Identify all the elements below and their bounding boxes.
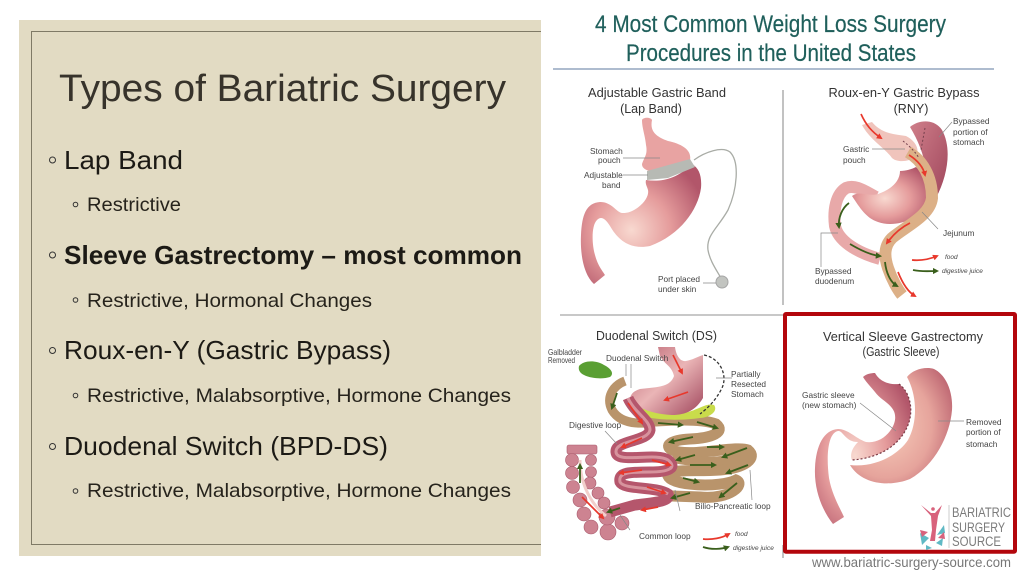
heading: DS: Duodenal Switch (DS) bbox=[596, 329, 717, 343]
sub-bullet: Sleeve mechanism: Restrictive, Hormonal Changes bbox=[87, 290, 372, 312]
infographic heading bbox=[595, 11, 947, 67]
bullet: Roux-en-Y: Roux-en-Y (Gastric Bypass) bbox=[64, 335, 391, 365]
callout labels: RNY: digestive juice bbox=[942, 268, 983, 275]
callout labels: lap band: band bbox=[602, 180, 621, 190]
sub-bullet: Duodenal Switch mechanism: Restrictive, Malabsorptive, Hormone Changes bbox=[87, 480, 511, 502]
digestive juice arrows bbox=[580, 393, 748, 549]
callout labels: RNY: food bbox=[945, 254, 958, 261]
heading: RNY: (RNY) bbox=[894, 102, 928, 116]
illustration: sleeve stomach bbox=[815, 368, 952, 524]
callout labels: sleeve: (new stomach) bbox=[802, 400, 857, 410]
callout labels: DS: Duodenal Switch bbox=[606, 353, 669, 363]
callout labels: sleeve: stomach bbox=[966, 439, 998, 449]
callout labels: lap band bbox=[584, 146, 716, 294]
heading: sleeve bbox=[823, 330, 984, 359]
sub-bullet: Lap Band mechanism: Restrictive bbox=[87, 194, 181, 216]
bullet: Duodenal Switch: Duodenal Switch (BPD-DS) bbox=[64, 431, 388, 461]
callout labels: DS: Galbladder bbox=[548, 347, 582, 357]
callout labels: lap band: Stomach bbox=[590, 146, 623, 156]
callout labels: lap band: under skin bbox=[658, 284, 697, 294]
slide panel bbox=[19, 20, 541, 556]
callout labels: RNY: Jejunum bbox=[943, 228, 974, 238]
icon: figure with leaves bbox=[920, 505, 945, 550]
callout labels: DS: Partially bbox=[731, 369, 761, 379]
callout labels: RNY: pouch bbox=[843, 155, 866, 165]
sub-bullet: Roux-en-Y mechanism: Restrictive, Malabsorptive, Hormone Changes bbox=[87, 385, 511, 407]
logo: Bariatric Surgery Source: SURGERY bbox=[952, 520, 1005, 535]
callout labels: DS: Digestive loop bbox=[569, 420, 622, 430]
residual stomach bbox=[630, 347, 703, 415]
logo: Bariatric Surgery Source: SOURCE bbox=[952, 534, 1001, 549]
heading: lap band bbox=[588, 86, 726, 116]
callout labels: RNY: Bypassed bbox=[815, 266, 852, 276]
pancreas bbox=[633, 402, 715, 420]
heading: lap band: (Lap Band) bbox=[620, 102, 682, 116]
callout labels: sleeve bbox=[802, 390, 1002, 449]
callout labels: RNY: stomach bbox=[953, 137, 985, 147]
digestive loop bbox=[610, 398, 672, 512]
bullet: Lap Band: Lap Band bbox=[64, 145, 183, 175]
callout labels: DS: Removed bbox=[548, 355, 575, 365]
panel: Roux-en-Y gastric bypass bbox=[815, 86, 990, 296]
gallbladder bbox=[579, 361, 612, 378]
callout labels: RNY: duodenum bbox=[815, 276, 854, 286]
bulleted list bbox=[50, 145, 522, 502]
panel: adjustable gastric band bbox=[581, 86, 736, 294]
infographic heading: 4 Most Common Weight Loss Surgery bbox=[595, 11, 947, 38]
title: Types of Bariatric Surgery bbox=[59, 68, 506, 110]
illustration: banded stomach bbox=[581, 118, 736, 288]
source URL: www.bariatric-surgery-source.com bbox=[811, 554, 1011, 570]
heading: sleeve: (Gastric Sleeve) bbox=[862, 345, 940, 359]
callout labels: DS: digestive juice bbox=[733, 545, 774, 552]
bilio-pancreatic loop bbox=[640, 420, 751, 497]
heading: sleeve: Vertical Sleeve Gastrectomy bbox=[823, 330, 984, 344]
panel: duodenal switch bbox=[548, 329, 774, 552]
callout labels: RNY: Bypassed bbox=[953, 116, 990, 126]
heading: lap band: Adjustable Gastric Band bbox=[588, 86, 726, 100]
callout labels: lap band: pouch bbox=[598, 155, 621, 165]
infographic heading: Procedures in the United States bbox=[626, 40, 916, 67]
callout labels: DS: Stomach bbox=[731, 389, 764, 399]
illustration: duodenal switch bbox=[566, 347, 751, 549]
food arrows bbox=[582, 355, 729, 539]
callout labels: DS: Common loop bbox=[639, 531, 691, 541]
callout labels: DS bbox=[548, 347, 774, 552]
highlight frame bbox=[785, 314, 1015, 552]
callout labels: RNY: Gastric bbox=[843, 144, 869, 154]
callout labels: lap band: Adjustable bbox=[584, 170, 623, 180]
bullet: Sleeve Gastrectomy: Sleeve Gastrectomy – most common bbox=[64, 240, 522, 270]
common loop bbox=[566, 445, 629, 540]
callout labels: DS: Resected bbox=[731, 379, 766, 389]
callout labels: RNY: portion of bbox=[953, 127, 988, 137]
callout labels: sleeve: Removed bbox=[966, 417, 1002, 427]
logo: Bariatric Surgery Source bbox=[920, 505, 1011, 550]
heading: RNY: Roux-en-Y Gastric Bypass bbox=[828, 86, 980, 100]
panel: vertical sleeve gastrectomy (highlighted) bbox=[785, 314, 1015, 552]
heading: RNY bbox=[828, 86, 980, 116]
callout labels: DS: food bbox=[735, 531, 748, 538]
callout labels: DS: Bilio-Pancreatic loop bbox=[695, 501, 771, 511]
logo: Bariatric Surgery Source: BARIATRIC bbox=[952, 505, 1011, 520]
callout labels: sleeve: Gastric sleeve bbox=[802, 390, 855, 400]
callout labels: sleeve: portion of bbox=[966, 427, 1001, 437]
callout labels: RNY bbox=[815, 116, 990, 286]
callout labels: lap band: Port placed bbox=[658, 274, 700, 284]
illustration: bypass bbox=[834, 114, 948, 296]
